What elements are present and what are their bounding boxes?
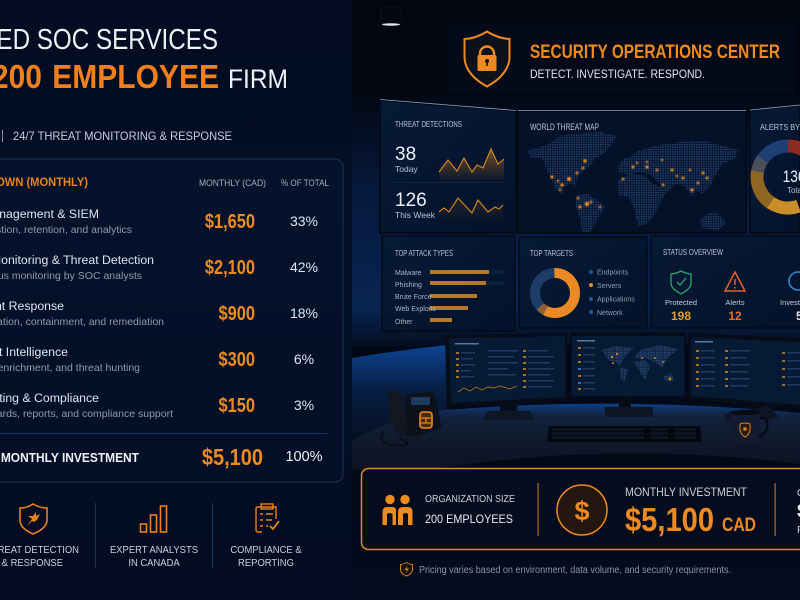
threat hot spots xyxy=(550,159,708,208)
icon: dollar coin xyxy=(557,485,607,535)
left background xyxy=(0,0,352,600)
dashboard mini content xyxy=(455,343,554,388)
icon: header shield lock xyxy=(464,32,510,86)
row: monitoring: $2,100 xyxy=(205,255,255,278)
legend: targets: Network xyxy=(597,310,623,317)
row: log management: 33% xyxy=(290,213,318,229)
total row: $5,100 xyxy=(202,444,263,470)
monitor left xyxy=(445,333,567,407)
feature: compliance: REPORTING xyxy=(238,558,294,569)
feature: threat detection: & RESPONSE xyxy=(2,558,63,569)
wall column xyxy=(352,96,800,346)
table header xyxy=(0,177,329,189)
organization size: 200 EMPLOYEES xyxy=(425,514,513,526)
table header: % OF TOTAL xyxy=(281,178,329,189)
panel: threat detections: 126 xyxy=(395,190,427,211)
icon: small shield xyxy=(400,562,412,576)
icon: protected shield xyxy=(671,271,691,294)
panel: world threat map: WORLD THREAT MAP xyxy=(530,122,599,132)
mini world map xyxy=(602,345,678,382)
feature: compliance: COMPLIANCE & xyxy=(230,545,302,556)
ceiling lamp xyxy=(381,7,402,26)
legend: targets: Endpoints xyxy=(597,270,629,276)
panel: status overview: STATUS OVERVIEW xyxy=(663,247,723,257)
right background xyxy=(352,0,800,600)
line chart: this week xyxy=(439,198,503,222)
mini hot spots xyxy=(611,353,672,380)
monthly investment: MONTHLY INVESTMENT xyxy=(625,485,748,499)
title xyxy=(0,23,288,95)
legend: targets xyxy=(589,270,635,317)
wall glow xyxy=(352,345,447,440)
mini sidebar xyxy=(577,340,595,390)
icon: people xyxy=(382,495,412,525)
monthly investment xyxy=(625,485,756,538)
stand right xyxy=(725,406,780,422)
divider xyxy=(212,503,213,568)
legend: targets: Applications xyxy=(597,296,635,304)
row: log management: $1,650 xyxy=(205,209,255,232)
desk xyxy=(352,404,800,470)
bar chart: attack types: Other xyxy=(395,319,413,326)
icon: shield xyxy=(20,504,47,534)
organization size xyxy=(425,494,515,526)
row: incident response: 18% xyxy=(290,305,318,321)
panel: alerts by severity xyxy=(745,105,800,233)
monitor right xyxy=(688,333,800,409)
panel: status overview xyxy=(651,236,800,328)
coffee mug xyxy=(730,410,767,444)
feature: expert analysts: IN CANADA xyxy=(128,558,180,569)
panel: top targets: TOP TARGETS xyxy=(530,248,573,258)
row: monitoring xyxy=(0,253,318,282)
monthly investment: $5,100 xyxy=(625,501,714,538)
panel: threat detections: 38 xyxy=(395,144,416,165)
total row xyxy=(0,444,323,470)
feature: threat detection xyxy=(0,504,79,569)
icon: dollar coin: $ xyxy=(574,496,590,526)
panel: threat detections: Today xyxy=(395,164,418,174)
total row: 100% xyxy=(285,449,323,465)
divider xyxy=(95,503,96,568)
phone xyxy=(382,391,442,445)
legend: targets: Servers xyxy=(597,283,622,290)
icon: bars xyxy=(140,506,166,532)
line chart: today xyxy=(439,149,504,182)
panel: threat detections: This Week xyxy=(395,210,436,220)
bar chart: attack types: Web Exploits xyxy=(395,306,436,313)
monthly investment: CAD xyxy=(722,515,756,536)
row: incident response: $900 xyxy=(219,301,255,324)
organization size: ORGANIZATION SIZE xyxy=(425,494,515,505)
panel: top attack types: TOP ATTACK TYPES xyxy=(395,248,453,258)
feature: expert analysts xyxy=(110,506,198,569)
keyboard xyxy=(547,426,702,442)
header band xyxy=(447,24,796,94)
footnote: Pricing varies based on environment, data volume, and security requirements. xyxy=(419,565,731,576)
stand center xyxy=(605,399,653,417)
panel: world threat map xyxy=(518,110,746,233)
bar chart: attack types: Brute Force xyxy=(395,294,432,301)
row: threat intelligence: 6% xyxy=(294,351,314,367)
header subtitle: DETECT. INVESTIGATE. RESPOND. xyxy=(530,67,705,81)
icon: investigating ring xyxy=(789,272,800,290)
monitor center xyxy=(570,332,686,399)
panel: key figures xyxy=(362,468,800,550)
panel: status overview: 12 xyxy=(728,309,742,323)
row: threat intelligence xyxy=(0,345,314,374)
feature: expert analysts: EXPERT ANALYSTS xyxy=(110,545,198,556)
row: reporting xyxy=(0,391,314,420)
world map dots xyxy=(528,132,738,232)
cost per employee xyxy=(797,488,800,536)
bar chart: attack types: Malware xyxy=(395,270,422,277)
row: log management xyxy=(0,207,318,236)
bar chart: attack types: Phishing xyxy=(395,282,422,289)
panel: threat detections xyxy=(380,100,516,233)
row: monitoring: 42% xyxy=(290,259,318,275)
donut: targets xyxy=(528,266,582,320)
panel: cost breakdown xyxy=(0,159,343,482)
row: threat intelligence: $300 xyxy=(219,347,255,370)
icon: clipboard check xyxy=(256,504,279,532)
row: reporting: $150 xyxy=(219,393,255,416)
panel: status overview: 198 xyxy=(671,309,691,323)
panel: threat detections: THREAT DETECTIONS xyxy=(395,119,462,129)
subtitle: 24/7 THREAT MONITORING & RESPONSE xyxy=(13,129,232,143)
panel: top targets xyxy=(519,237,647,328)
panel: status overview: Alerts xyxy=(725,298,745,307)
table header: MONTHLY (CAD) xyxy=(199,178,266,189)
donut: severity xyxy=(745,134,800,220)
panel: top attack types xyxy=(382,236,515,331)
stand left xyxy=(483,402,534,420)
title: FIRM xyxy=(228,64,288,94)
title: EMPLOYEE xyxy=(52,58,219,95)
panel: status overview: Protected xyxy=(665,298,697,307)
icon: alert triangle xyxy=(725,272,745,291)
bar chart: attack types xyxy=(395,270,504,326)
row: reporting: 3% xyxy=(294,397,314,413)
feature: compliance xyxy=(230,504,302,569)
dashboard mini content xyxy=(695,341,800,387)
row: incident response xyxy=(0,299,318,328)
